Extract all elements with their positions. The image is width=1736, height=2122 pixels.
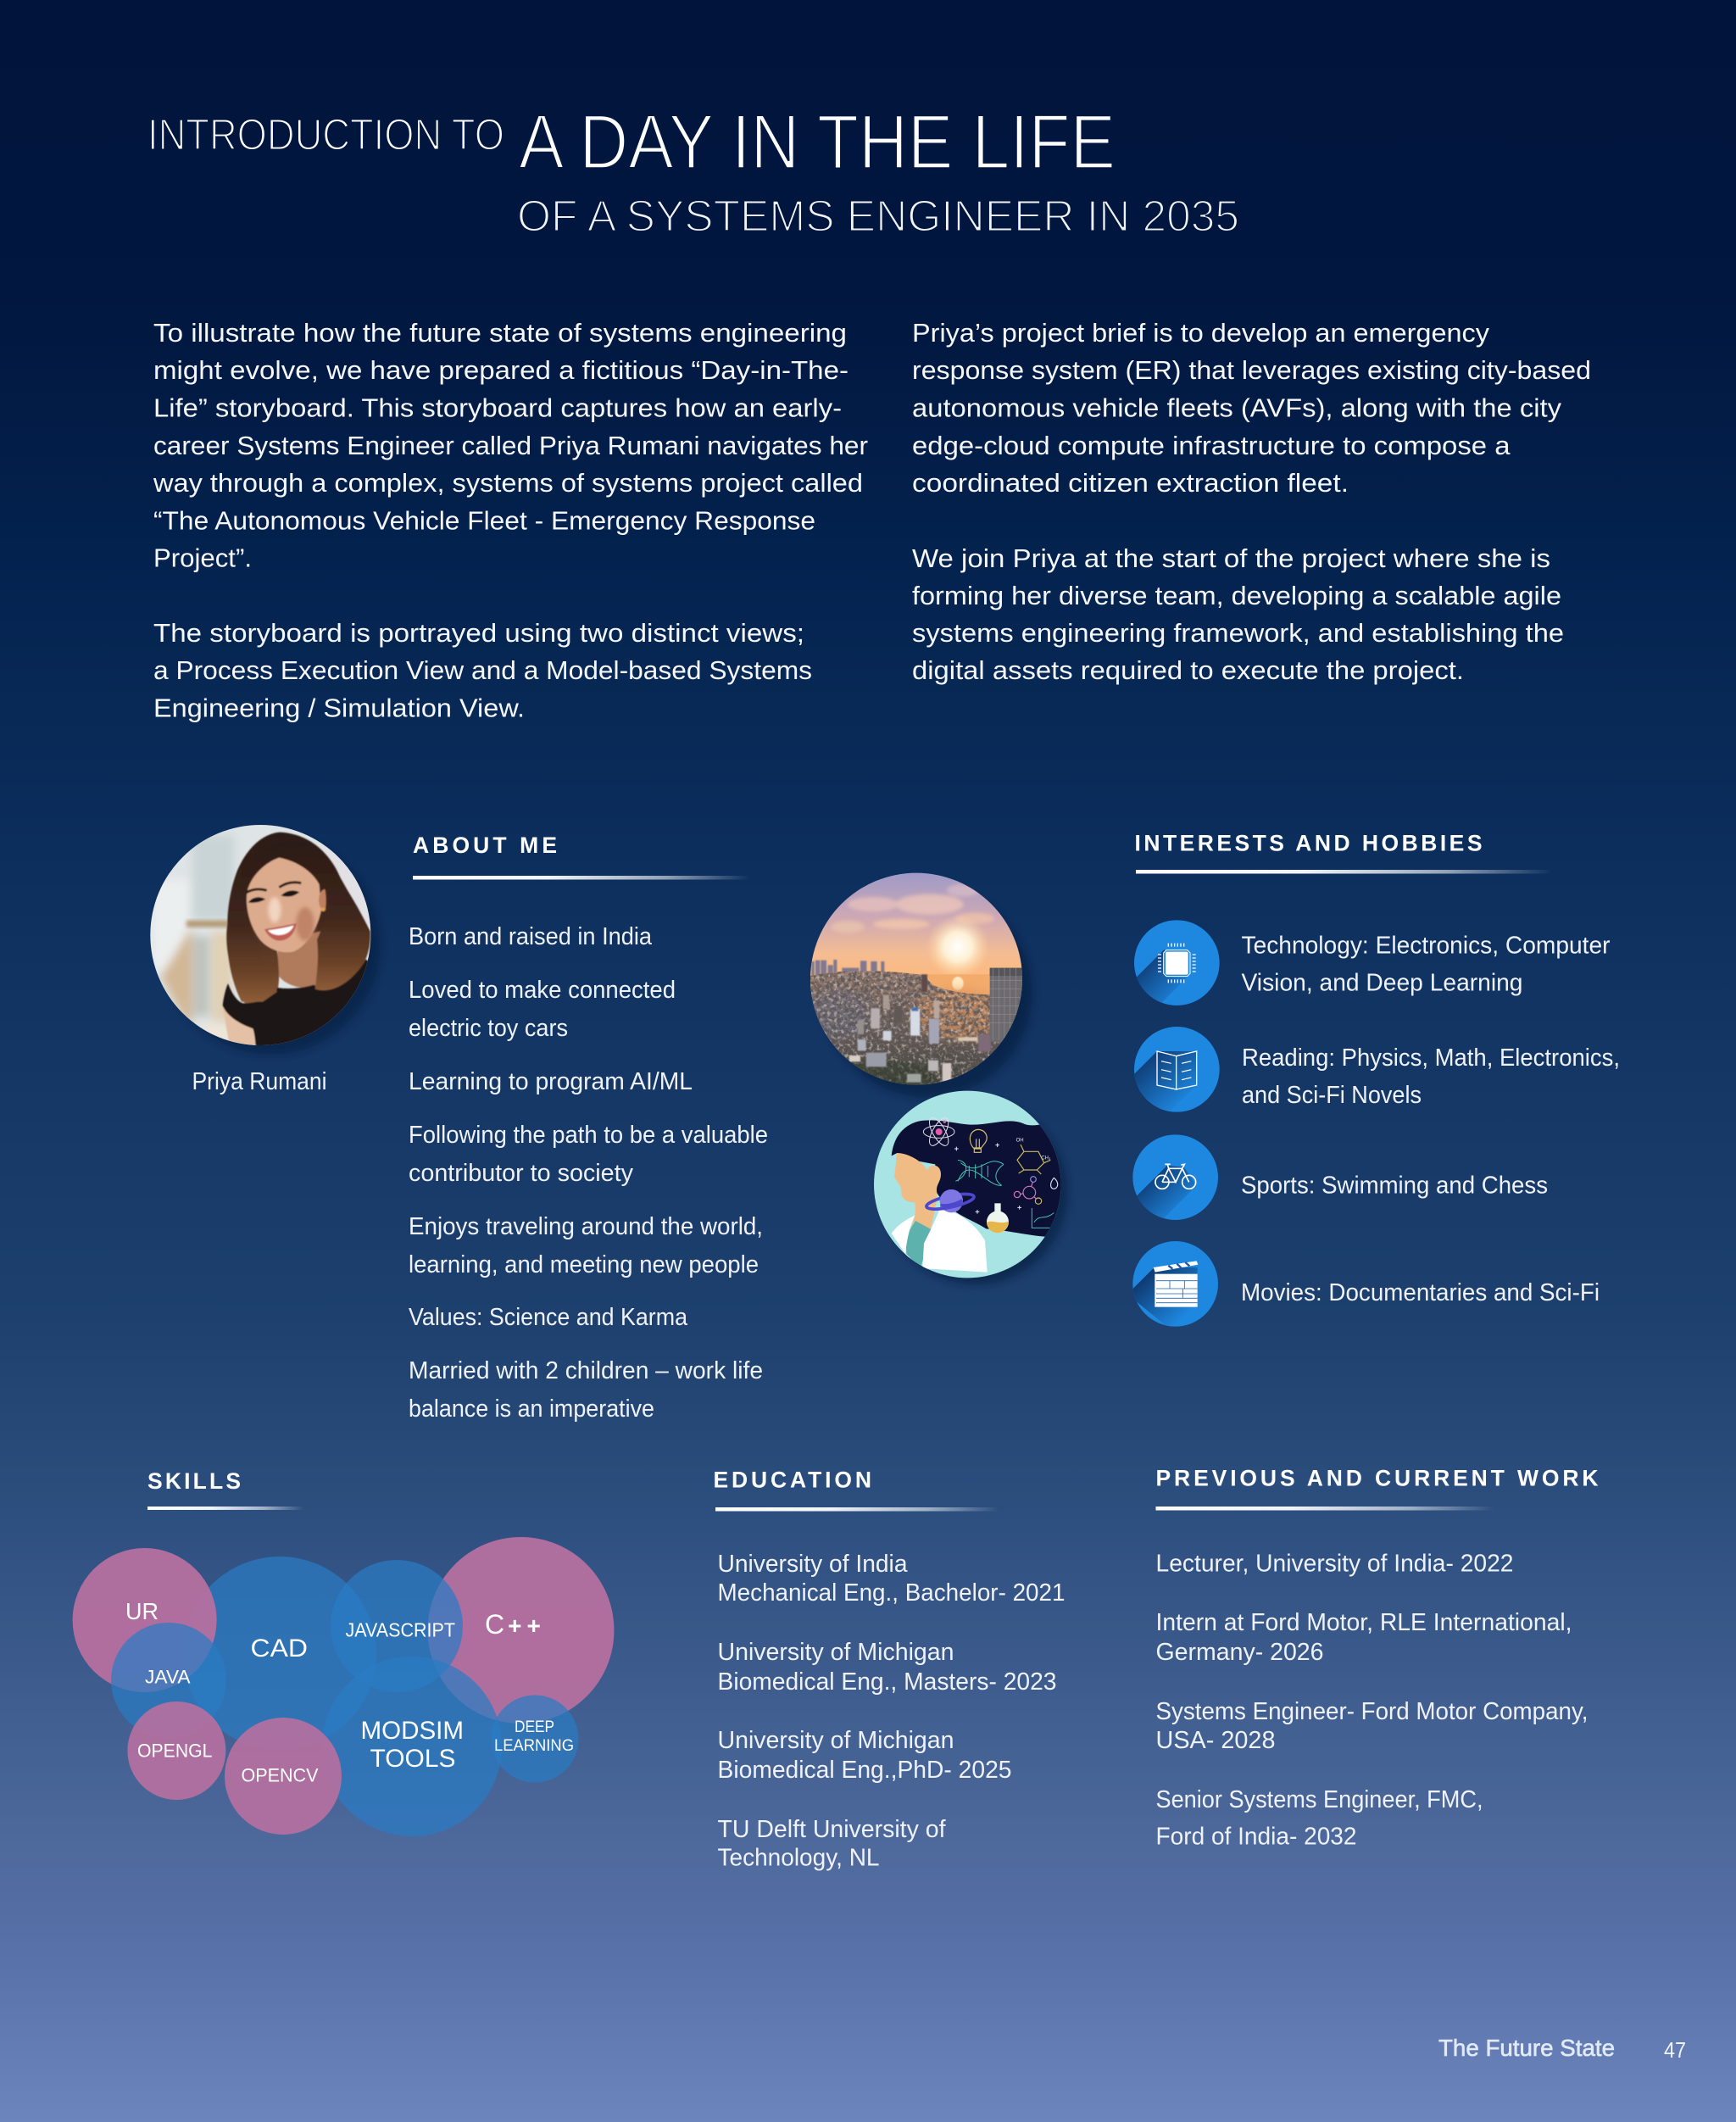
arm [223,1007,257,1049]
work list: Senior Systems Engineer, FMC, [1156,1786,1483,1813]
work list: USA- 2028 [1156,1727,1275,1754]
bubble chart: skills: OPENGL [137,1740,212,1762]
title [147,100,1239,241]
intro text: right column: systems engineering framework, and establishing the [912,618,1564,648]
about me text list: Loved to make connected [409,977,676,1004]
text: reading line 2: and Sci-Fi Novels [1242,1082,1422,1109]
intro text: right column: response system (ER) that leverages existing city-based [912,355,1591,385]
about me text list: balance is an imperative [409,1395,654,1423]
icon: open book [1134,1027,1220,1112]
small line chart [1032,1208,1054,1228]
hair [892,1119,1066,1237]
intro text: left column: To illustrate how the future state of systems engineering [153,318,847,348]
hair back [226,833,370,1003]
shirt and lab coat [905,1221,931,1266]
intro text: left column: Life” storyboard. This storyboard captures how an early- [153,393,842,422]
photo: city sunset skyline [808,871,1032,1098]
work list: Systems Engineer- Ford Motor Company, [1156,1698,1589,1725]
education list: Biomedical Eng., Masters- 2023 [717,1668,1056,1696]
intro text: left column [153,318,868,722]
about me text list: electric toy cars [409,1015,568,1042]
DNA helix [955,1160,1004,1185]
heading: interests and hobbies: INTERESTS AND HOBBIES [1134,831,1482,856]
about me text list: Following the path to be a valuable [409,1122,768,1149]
footer: page number: 47 [1664,2037,1686,2063]
bubble chart: skills: C++ [485,1609,541,1640]
neck [277,931,322,988]
text: movies: Movies: Documentaries and Sci-Fi [1241,1279,1600,1306]
title: of a systems engineer in 2035: OF A SYSTEMS ENGINEER IN 2035 [517,192,1239,241]
flask [987,1203,1009,1233]
intro text: left column: The storyboard is portrayed using two distinct views; [153,618,804,648]
planet [926,1189,975,1212]
intro text: left column: a Process Execution View and a Model-based Systems [153,655,812,685]
heading: skills: SKILLS [147,1468,241,1494]
plus signs [954,1143,1021,1214]
heading: previous and current work: PREVIOUS AND CURRENT WORK [1156,1465,1599,1490]
intro text: left column: way through a complex, systems of systems project called [153,468,863,498]
work list: Intern at Ford Motor, RLE International, [1156,1609,1572,1636]
text: sports: Sports: Swimming and Chess [1241,1172,1548,1199]
work list: Germany- 2026 [1156,1639,1324,1666]
face and neck [894,1153,941,1236]
molecule [1014,1177,1058,1204]
education list: TU Delft University of [717,1816,946,1843]
chemical hexagon: OH [1016,1139,1024,1144]
intro text: right column: Priya’s project brief is to develop an emergency [912,318,1490,348]
intro text: left column: might evolve, we have prepared a fictitious “Day-in-The- [153,355,849,385]
bubble chart: skills: CAD [251,1635,308,1663]
education list: University of Michigan [717,1639,954,1666]
caption: Priya Rumani: Priya Rumani [192,1068,327,1095]
section: skills [73,1468,615,1836]
section: education [714,1467,1065,1872]
about me text list: Married with 2 children – work life [409,1357,763,1384]
about me text list: Learning to program AI/ML [409,1068,693,1095]
intro text: left column: “The Autonomous Vehicle Fleet - Emergency Response [153,505,815,536]
intro text: right column: digital assets required to execute the project. [912,655,1464,685]
text: technology line 2: Vision, and Deep Learning [1241,970,1522,997]
intro text: right column: autonomous vehicle fleets (AVFs), along with the city [912,393,1562,422]
illustration: scientist with ideas in her hair [874,1091,1068,1284]
bubble chart: skills [73,1537,615,1836]
bubble chart: skills: UR [125,1598,159,1624]
bubble chart: skills: DEEP [515,1718,554,1736]
section: previous and current work [1156,1465,1599,1850]
icon: film clapperboard [1132,1241,1218,1327]
intro text: right column: We join Priya at the start of the project where she is [912,543,1550,573]
work list: Ford of India- 2032 [1156,1823,1356,1850]
chemical hexagon: CH₃ [1041,1156,1051,1161]
education list: Mechanical Eng., Bachelor- 2021 [717,1579,1065,1607]
intro text: right column: edge-cloud compute infrastructure to compose a [912,431,1511,460]
intro text: left column: Engineering / Simulation View. [153,693,525,722]
work list: Lecturer, University of India- 2022 [1156,1550,1514,1577]
intro text: right column: forming her diverse team, developing a scalable agile [912,581,1561,610]
about me text list [409,923,768,1423]
eyes and brows [246,883,301,893]
work list [1156,1550,1589,1850]
section: about me [409,833,768,1423]
portrait photo: Priya Rumani [147,821,380,1055]
bubble chart: skills: LEARNING [494,1737,574,1755]
text: technology: Technology: Electronics, Computer [1241,933,1611,960]
education list: University of India [717,1551,908,1578]
heading: education: EDUCATION [714,1467,871,1492]
bubble chart: skills: JAVA [145,1667,191,1687]
about me text list: Born and raised in India [409,923,652,950]
title: a day in the life: A DAY IN THE LIFE [519,100,1116,185]
intro text: right column [912,318,1591,685]
atom symbol [923,1115,954,1149]
face [247,858,321,952]
education list [717,1551,1065,1872]
section: interests and hobbies [1121,831,1620,1331]
education list: Biomedical Eng.,PhD- 2025 [717,1757,1012,1784]
title: introduction to: INTRODUCTION TO [147,110,504,159]
text: reading: Reading: Physics, Math, Electronics, [1242,1044,1620,1072]
icon: bicycle [1132,1134,1218,1223]
intro text: left column: Project”. [153,543,252,573]
bubble chart: skills: OPENCV [241,1765,319,1785]
education list: Technology, NL [717,1845,880,1872]
about me text list: learning, and meeting new people [409,1251,759,1278]
bubble chart: skills: MODSIM [361,1717,464,1745]
about me text list: Enjoys traveling around the world, [409,1213,763,1240]
chemical hexagon [1016,1139,1051,1174]
intro text: left column: career Systems Engineer called Priya Rumani navigates her [153,431,868,460]
bubble chart: skills: TOOLS [370,1745,456,1773]
bubble chart: skills: JAVASCRIPT [346,1619,455,1641]
footer: section name: The Future State [1438,2035,1615,2061]
intro text: right column: coordinated citizen extraction fleet. [912,468,1349,498]
icon: microchip [1134,920,1220,1005]
front hair strands [228,958,278,1003]
about me text list: contributor to society [409,1160,634,1187]
mouth [264,923,297,941]
heading: about me: ABOUT ME [413,833,557,858]
shirt [223,960,373,1048]
education list: University of Michigan [717,1727,954,1754]
light bulb [970,1129,987,1152]
about me text list: Values: Science and Karma [409,1304,687,1331]
